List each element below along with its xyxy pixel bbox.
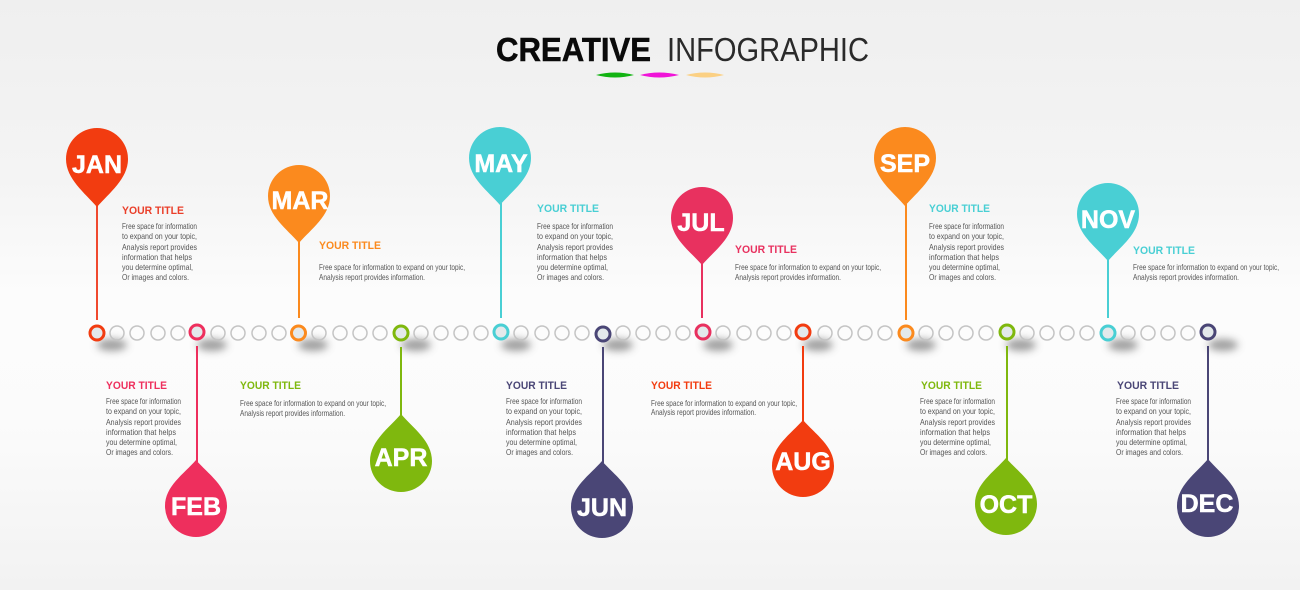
text block: JAN: Free space for information <box>122 221 197 231</box>
month: FEB <box>165 325 227 537</box>
node shadows <box>97 339 1238 351</box>
text block: SEP: Free space for information <box>929 221 1004 231</box>
text block: MAY: Analysis report provides <box>537 242 613 252</box>
text block: DEC: Or images and colors. <box>1116 447 1183 457</box>
month: MAR: MAR <box>272 187 328 215</box>
text block: JUL: Analysis report provides information. <box>735 272 841 282</box>
text block: SEP: to expand on your topic, <box>929 231 1004 241</box>
text block: JUN: Free space for information <box>506 396 582 406</box>
month: JUL <box>671 187 733 339</box>
text block: JUN: Analysis report provides <box>506 417 582 427</box>
title: CREATIVE <box>496 31 651 68</box>
text block: MAY: you determine optimal, <box>537 262 608 272</box>
text block: SEP <box>929 203 1004 282</box>
text block: OCT: information that helps <box>920 427 990 437</box>
title <box>496 31 869 68</box>
text block: DEC: information that helps <box>1116 427 1186 437</box>
text block: FEB: Or images and colors. <box>106 447 173 457</box>
text block: JAN <box>122 205 197 282</box>
month: JUN <box>571 327 633 538</box>
month: JAN <box>66 128 128 340</box>
text block: FEB: to expand on your topic, <box>106 406 181 416</box>
text block: JUL: YOUR TITLE <box>735 244 797 256</box>
month: JUN: JUN <box>577 494 627 522</box>
month: OCT: OCT <box>980 491 1032 519</box>
month: AUG: AUG <box>775 448 831 476</box>
text block: DEC: YOUR TITLE <box>1117 380 1179 392</box>
month: JAN: JAN <box>72 151 122 179</box>
text block: SEP: Or images and colors. <box>929 272 996 282</box>
text block: SEP: YOUR TITLE <box>929 203 990 215</box>
timeline small dots <box>110 326 1195 340</box>
text block: MAR: YOUR TITLE <box>319 240 381 252</box>
text block: NOV: YOUR TITLE <box>1133 245 1195 257</box>
text block: JAN: you determine optimal, <box>122 262 193 272</box>
text block: APR: YOUR TITLE <box>240 380 301 392</box>
text block: APR <box>240 380 386 418</box>
month: AUG <box>772 325 834 497</box>
text block: JAN: information that helps <box>122 252 192 262</box>
month: NOV <box>1077 183 1139 340</box>
text block: DEC <box>1116 380 1191 457</box>
title accent marks <box>596 72 724 78</box>
month: APR <box>370 326 432 492</box>
text block: AUG: Analysis report provides information. <box>651 407 756 417</box>
text block: OCT <box>920 380 995 457</box>
text block: DEC: Analysis report provides <box>1116 417 1191 427</box>
text block: DEC: to expand on your topic, <box>1116 406 1191 416</box>
text block: MAR: Free space for information to expand on your topic, <box>319 262 465 272</box>
text block: AUG: Free space for information to expand on your topic, <box>651 398 797 408</box>
text block: JUN: to expand on your topic, <box>506 406 582 416</box>
month: OCT <box>975 325 1037 535</box>
text block: APR: Analysis report provides information. <box>240 408 345 418</box>
text block: NOV: Analysis report provides information. <box>1133 272 1239 282</box>
month: MAR <box>268 165 330 340</box>
text block: JUN: Or images and colors. <box>506 447 573 457</box>
month: FEB: FEB <box>171 493 221 521</box>
text block: JUN: you determine optimal, <box>506 437 577 447</box>
text block: FEB: Analysis report provides <box>106 417 181 427</box>
text block: FEB: Free space for information <box>106 396 181 406</box>
text block: JAN: Or images and colors. <box>122 272 189 282</box>
text block: JAN: Analysis report provides <box>122 242 197 252</box>
text block: AUG: YOUR TITLE <box>651 380 712 392</box>
text block: MAY: Or images and colors. <box>537 272 604 282</box>
title: INFOGRAPHIC <box>667 31 869 68</box>
text block: JUL <box>735 244 881 282</box>
text block: JUL: Free space for information to expand on your topic, <box>735 262 881 272</box>
text block: JAN: to expand on your topic, <box>122 231 197 241</box>
month: SEP: SEP <box>880 150 930 178</box>
text block: MAY: to expand on your topic, <box>537 231 613 241</box>
text block: SEP: you determine optimal, <box>929 262 1000 272</box>
month: MAY <box>469 127 531 339</box>
text block: OCT: Free space for information <box>920 396 995 406</box>
text block: JUN: YOUR TITLE <box>506 380 567 392</box>
text block: DEC: you determine optimal, <box>1116 437 1187 447</box>
text block: MAR <box>319 240 465 282</box>
text block: NOV <box>1133 245 1279 282</box>
month: APR: APR <box>375 444 427 472</box>
text block: SEP: information that helps <box>929 252 999 262</box>
month: DEC: DEC <box>1181 490 1233 518</box>
text block: FEB <box>106 380 181 457</box>
text block: MAY: YOUR TITLE <box>537 203 599 215</box>
text block: OCT: to expand on your topic, <box>920 406 995 416</box>
text block: FEB: you determine optimal, <box>106 437 177 447</box>
text block: JUN: information that helps <box>506 427 576 437</box>
text block: MAY: information that helps <box>537 252 607 262</box>
text block: AUG <box>651 380 797 417</box>
text block: FEB: YOUR TITLE <box>106 380 167 392</box>
month: MAY: MAY <box>474 150 528 178</box>
month: DEC <box>1177 325 1239 537</box>
text block: FEB: information that helps <box>106 427 176 437</box>
text block: MAY: Free space for information <box>537 221 613 231</box>
text block: JUN <box>506 380 582 457</box>
month: SEP <box>874 127 936 340</box>
text block: OCT: YOUR TITLE <box>921 380 982 392</box>
month: JUL: JUL <box>677 209 725 237</box>
month: NOV: NOV <box>1081 206 1135 234</box>
text block: OCT: you determine optimal, <box>920 437 991 447</box>
text block: OCT: Analysis report provides <box>920 417 995 427</box>
text block: JAN: YOUR TITLE <box>122 205 184 217</box>
text block: MAY <box>537 203 613 282</box>
text block: MAR: Analysis report provides information. <box>319 272 425 282</box>
text block: DEC: Free space for information <box>1116 396 1191 406</box>
text block: OCT: Or images and colors. <box>920 447 987 457</box>
text block: SEP: Analysis report provides <box>929 242 1004 252</box>
text block: APR: Free space for information to expand on your topic, <box>240 398 386 408</box>
